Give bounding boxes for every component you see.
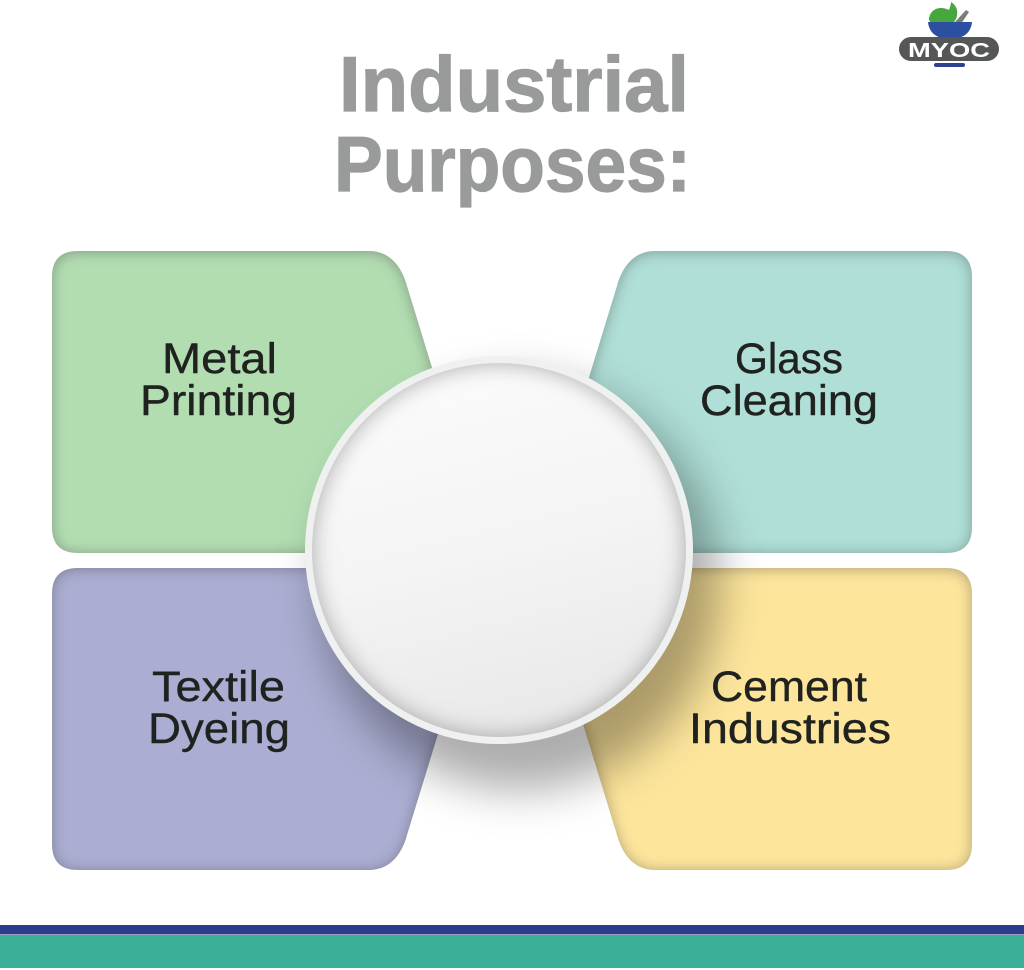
title <box>334 40 691 208</box>
logo: MYOC <box>899 2 999 67</box>
panel: metal printing <box>52 251 445 553</box>
panel: metal printing: Metal <box>162 335 277 383</box>
central circle <box>305 356 693 744</box>
circle drop shadow <box>320 380 720 790</box>
panel: metal printing: Printing <box>140 377 297 425</box>
logo: MYOC: MYOC <box>908 40 990 62</box>
panel: glass cleaning: Cleaning <box>700 377 878 425</box>
title: Purposes: <box>334 120 691 208</box>
panel: glass cleaning: Glass <box>735 335 843 383</box>
panel: glass cleaning <box>579 251 972 553</box>
panel: cement industries: Industries <box>689 705 891 753</box>
panel: cement industries: Cement <box>711 663 867 711</box>
title: Industrial <box>339 40 689 128</box>
panel: textile dyeing <box>52 568 445 870</box>
panel: textile dyeing: Textile <box>152 663 285 711</box>
panel: cement industries <box>579 568 972 870</box>
panel: textile dyeing: Dyeing <box>148 705 290 753</box>
footer stripe: teal <box>0 935 1024 968</box>
footer stripe: navy <box>0 925 1024 934</box>
